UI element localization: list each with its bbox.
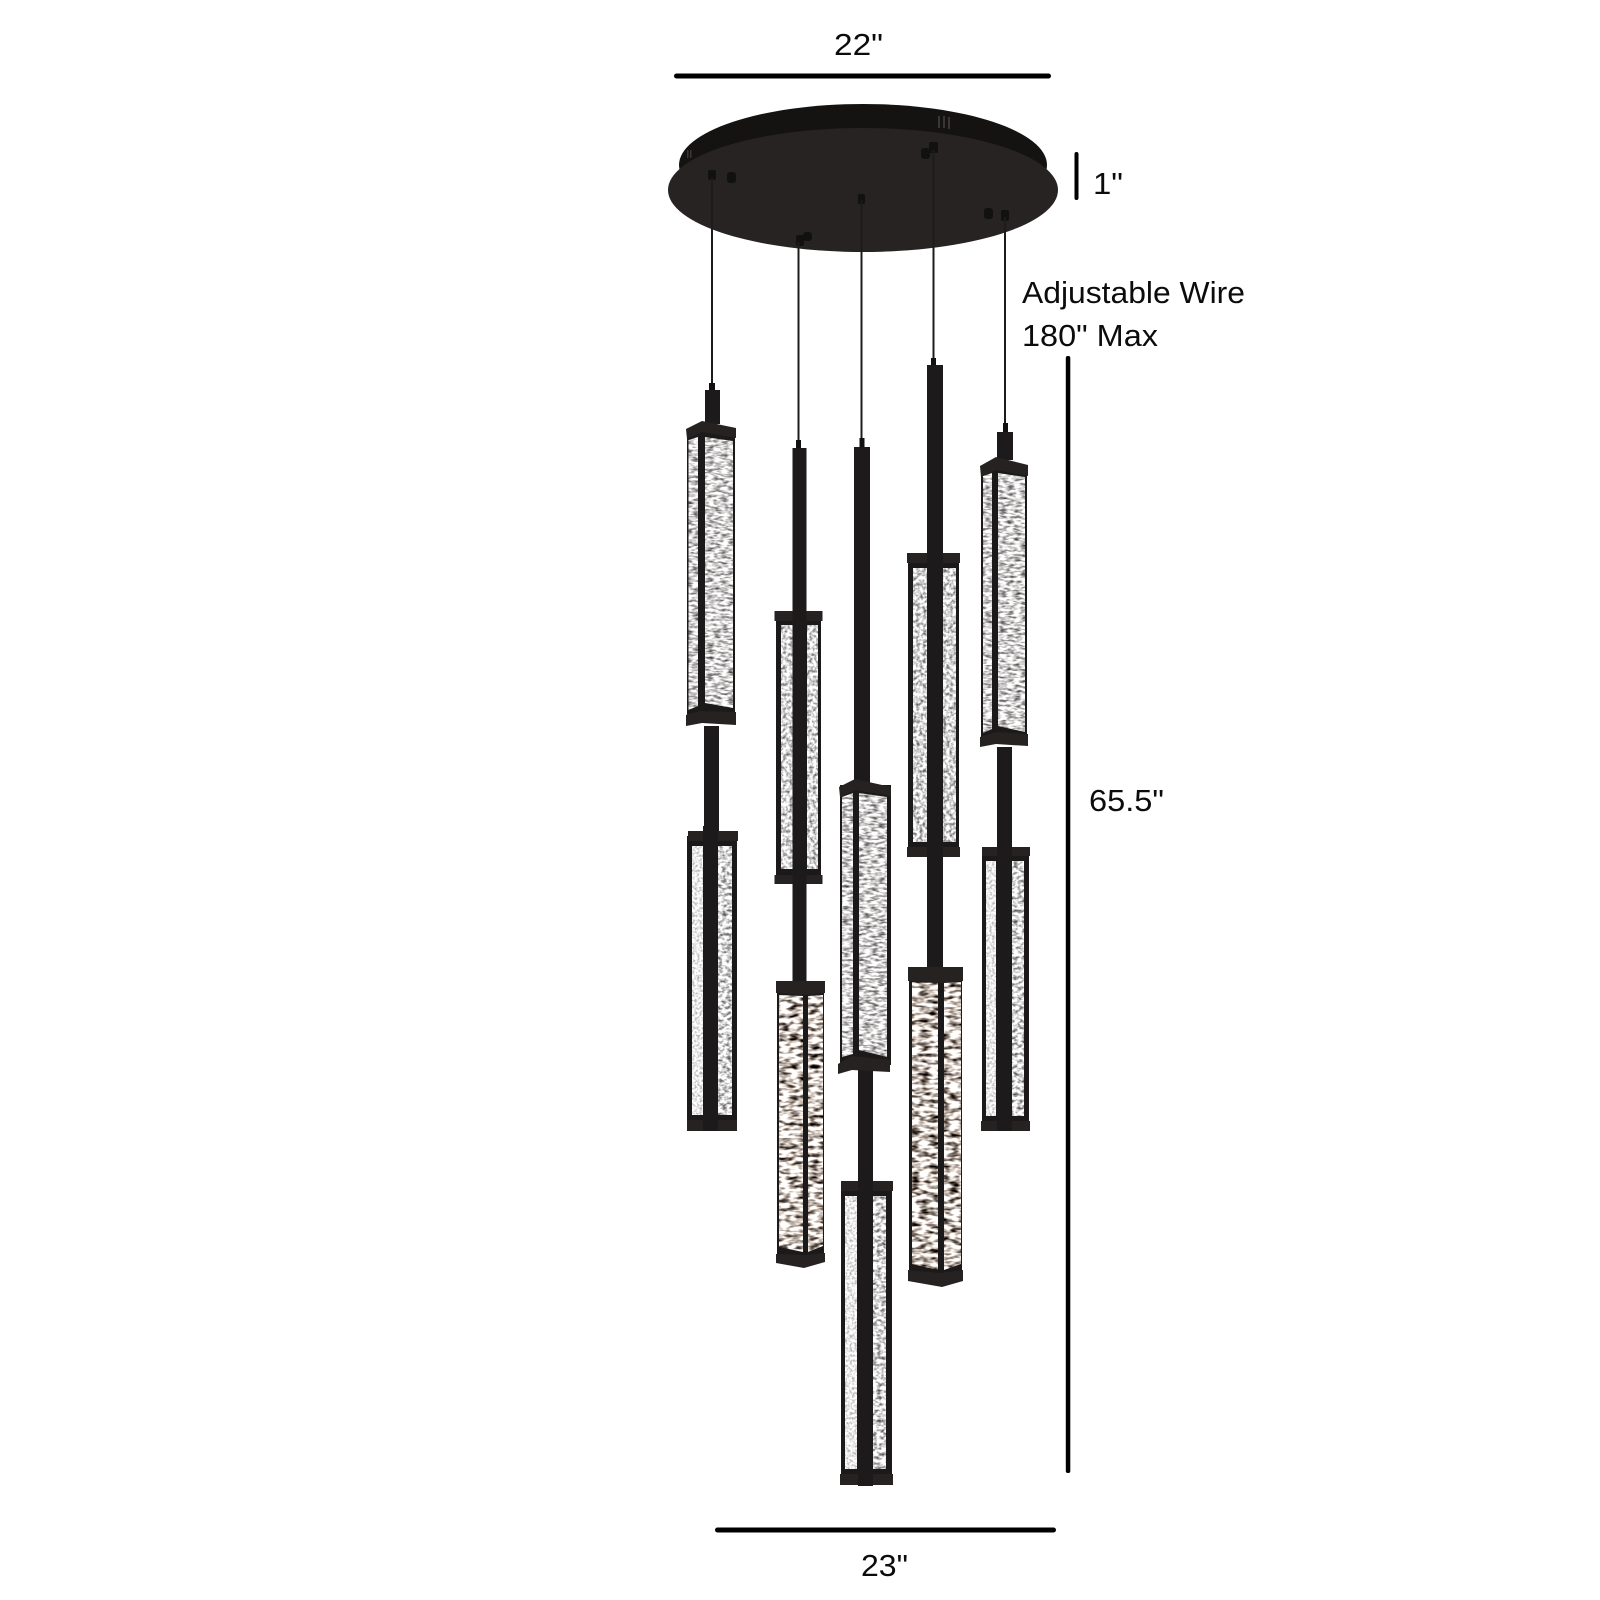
23 inch width label: 23" <box>861 1548 908 1583</box>
23 inch dimension bar <box>715 1528 1056 1532</box>
lower light module <box>687 826 738 1131</box>
adjustable wire note: 180" Max <box>1022 318 1159 353</box>
canopy mounts and screws <box>708 142 1009 246</box>
1 inch height bar <box>1074 152 1078 200</box>
22 inch width label: 22" <box>834 27 883 62</box>
lower light module <box>981 842 1030 1131</box>
pendant column 3 <box>838 200 893 1486</box>
lower light module <box>908 967 963 1287</box>
upper light module <box>980 457 1028 747</box>
65.5 inch label: 65.5" <box>1089 783 1164 818</box>
adjustable wire note <box>1022 275 1245 353</box>
adjustable wire note: Adjustable Wire <box>1022 275 1245 310</box>
pendant column 2 <box>774 242 825 1268</box>
1 inch label: 1" <box>1093 166 1123 201</box>
upper light module <box>907 553 960 857</box>
upper light module <box>774 611 822 884</box>
lower light module <box>776 981 825 1268</box>
upper light module <box>838 779 891 1074</box>
upper light module <box>686 421 736 726</box>
lower light module <box>840 1181 893 1485</box>
pendant column 1 <box>686 178 738 1131</box>
ceiling canopy <box>668 104 1058 252</box>
pendant column 5 <box>980 217 1030 1131</box>
pendant column 4 <box>907 150 963 1287</box>
canopy vents <box>687 116 950 158</box>
65.5 inch height bar <box>1066 356 1070 1473</box>
22 inch dimension bar <box>674 74 1051 78</box>
